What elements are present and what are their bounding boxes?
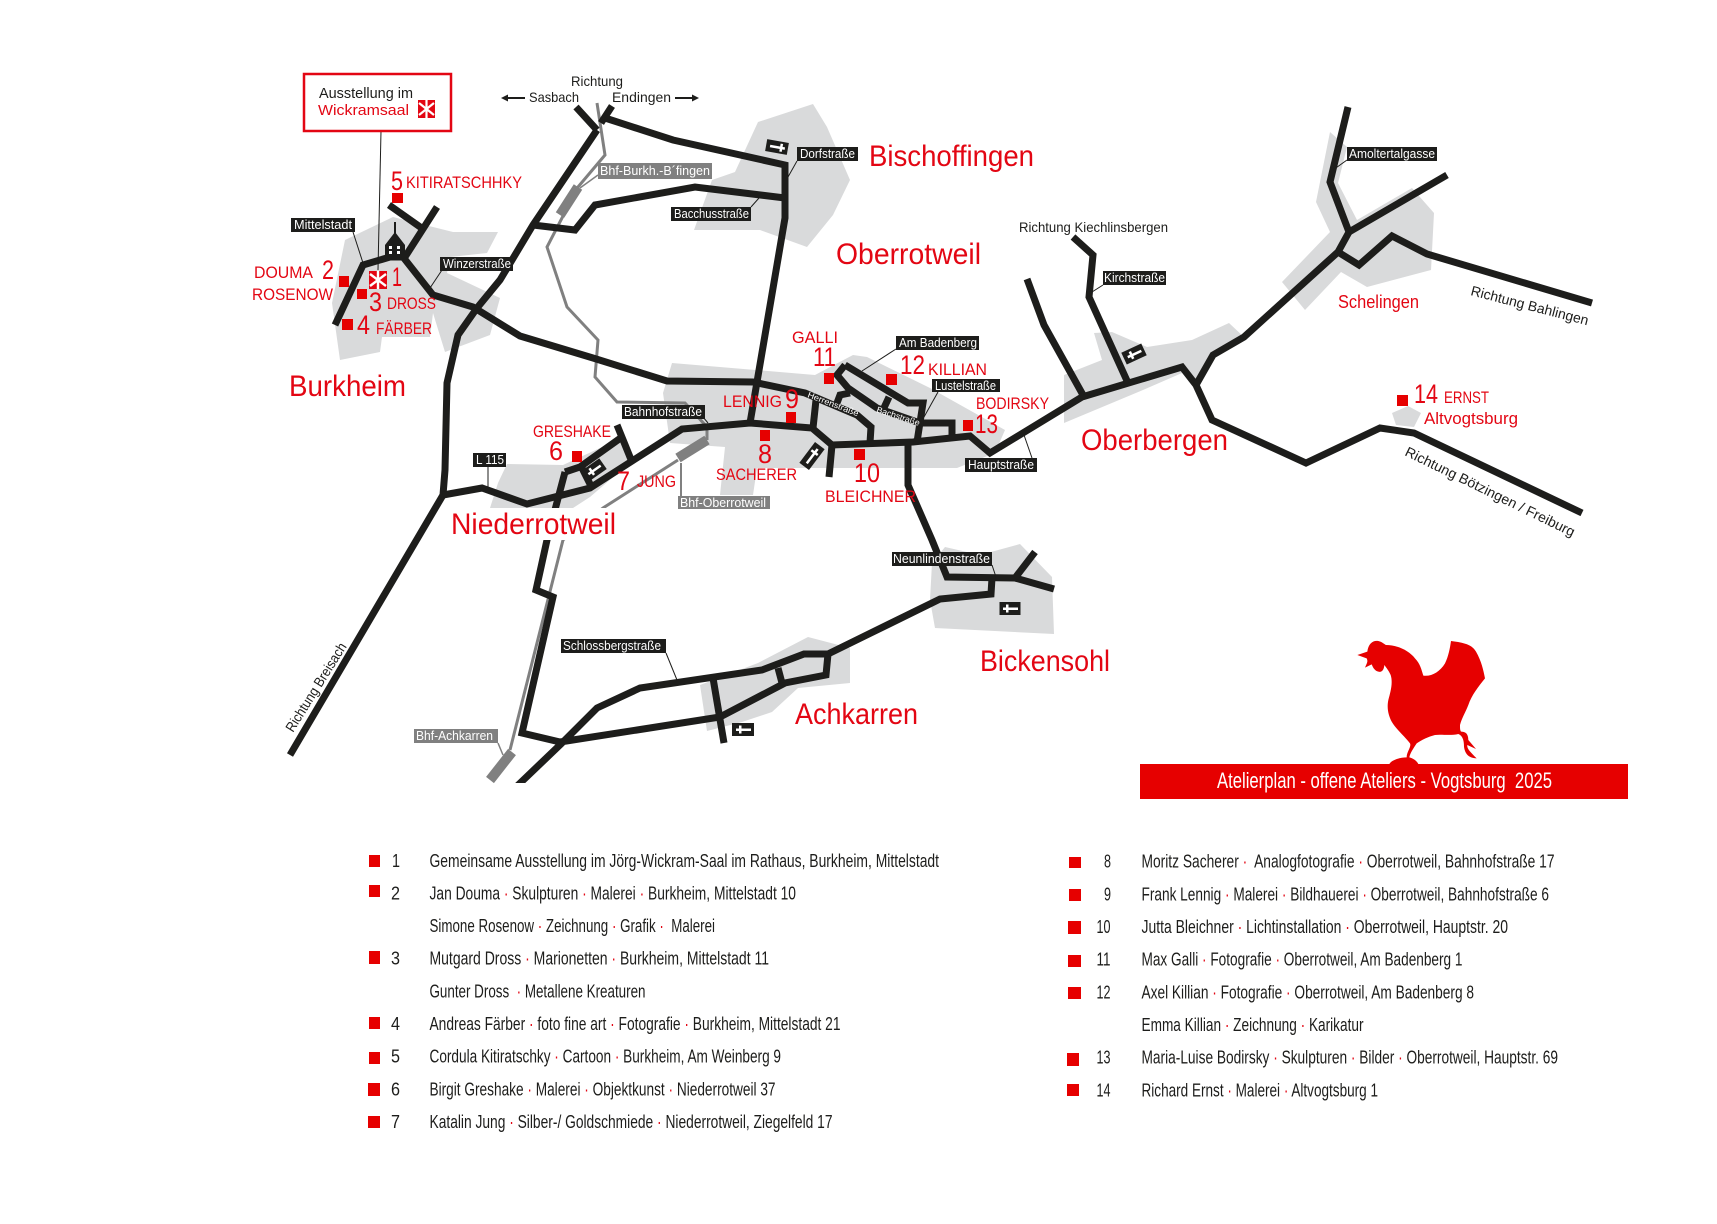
direction labels: Richtung Kiechlinsbergen	[1019, 219, 1168, 235]
marker 14: 14	[1414, 379, 1438, 409]
town names: Burkheim	[289, 370, 406, 403]
marker 9: LENNIG	[723, 392, 782, 411]
item 2: 2	[391, 883, 400, 903]
item 2: Jan Douma · Skulpturen · Malerei · Burkheim, Mittelstadt 10	[430, 883, 796, 903]
marker 7: JUNG	[637, 472, 676, 491]
marker 13	[963, 394, 1049, 439]
item 5: Cordula Kitiratschky · Cartoon · Burkheim, Am Weinberg 9	[430, 1047, 781, 1067]
item 12	[1068, 982, 1474, 1035]
marker 2: 2	[322, 255, 334, 285]
item 12: Emma Killian · Zeichnung · Karikatur	[1142, 1015, 1364, 1035]
marker 1: 1	[392, 262, 402, 292]
item 11: 11	[1096, 950, 1110, 970]
item 9: Frank Lennig · Malerei · Bildhauerei · Oberrotweil, Bahnhofstraße 6	[1142, 884, 1549, 904]
item 2	[369, 883, 796, 936]
railway line	[490, 103, 707, 780]
icon: church Niederrotweil	[581, 458, 607, 482]
direction labels: Endingen	[612, 89, 671, 105]
street name tags: Hauptstraße	[968, 458, 1034, 472]
item 6: Birgit Greshake · Malerei · Objektkunst · Niederrotweil 37	[430, 1079, 775, 1099]
icon: church Oberrotweil	[799, 442, 825, 470]
item 10: Jutta Bleichner · Lichtinstallation · Oberrotweil, Hauptstr. 20	[1142, 917, 1508, 937]
item 11: Max Galli · Fotografie · Oberrotweil, Am Badenberg 1	[1142, 950, 1462, 970]
item 13: Maria-Luise Bodirsky · Skulpturen · Bilder · Oberrotweil, Hauptstr. 69	[1142, 1048, 1558, 1068]
street name tags: Herrenstraße	[806, 390, 861, 418]
item 6: 6	[391, 1079, 400, 1099]
marker 9	[723, 384, 799, 423]
marker 5	[391, 166, 522, 203]
marker 1	[369, 262, 402, 292]
street name tags: L 115	[476, 453, 504, 467]
marker 10: 10	[854, 458, 880, 488]
legend: left column	[368, 851, 939, 1132]
item 13: 13	[1096, 1048, 1110, 1068]
marker 4: FÄRBER	[376, 319, 432, 338]
item 10: 10	[1096, 917, 1110, 937]
legend: right column	[1067, 852, 1558, 1100]
item 7: 7	[391, 1112, 400, 1132]
street name tags: Mittelstadt	[294, 218, 353, 232]
marker 5: 5	[391, 166, 403, 196]
marker 6: 6	[549, 436, 563, 466]
marker 4: 4	[357, 310, 370, 340]
item 2: Simone Rosenow · Zeichnung · Grafik · Malerei	[430, 916, 715, 936]
marker 11	[792, 328, 838, 384]
callout: Ausstellung im Wickramsaal: Ausstellung im	[319, 85, 413, 102]
station tags: Bhf-Burkh.-B´fingen	[600, 164, 710, 178]
town names: Niederrotweil	[451, 508, 616, 541]
marker 10	[825, 449, 916, 506]
marker 2: ROSENOW	[252, 285, 333, 304]
town names: Oberbergen	[1081, 424, 1228, 457]
item 3: Mutgard Dross · Marionetten · Burkheim, Mittelstadt 11	[430, 949, 769, 969]
marker 8: SACHERER	[716, 465, 797, 484]
title banner	[1140, 764, 1628, 799]
street name tags: Schlossbergstraße	[563, 639, 661, 653]
icon: church Achkarren	[732, 723, 754, 736]
direction labels: Richtung Bahlingen	[1469, 282, 1590, 328]
town names: Oberrotweil	[836, 238, 981, 271]
mask behind Niederrotweil	[448, 508, 620, 540]
marker 4	[342, 310, 432, 340]
item 3	[369, 949, 769, 1001]
item 14	[1067, 1080, 1378, 1100]
street name tags: Kirchstraße	[1104, 271, 1165, 285]
icon: church Bickensohl	[1000, 602, 1020, 615]
item 8: Moritz Sacherer · Analogfotografie · Oberrotweil, Bahnhofstraße 17	[1142, 852, 1554, 872]
direction labels: Richtung	[571, 73, 623, 89]
marker 8	[716, 430, 797, 484]
item 1: Gemeinsame Ausstellung im Jörg-Wickram-Saal im Rathaus, Burkheim, Mittelstadt	[430, 851, 939, 871]
item 8: 8	[1104, 852, 1111, 872]
marker 2	[252, 255, 349, 304]
marker 8: 8	[758, 439, 772, 469]
item 12: Axel Killian · Fotografie · Oberrotweil, Am Badenberg 8	[1142, 982, 1474, 1002]
town names: Bischoffingen	[869, 140, 1034, 173]
town names: Bickensohl	[980, 645, 1110, 678]
marker 11: GALLI	[792, 328, 838, 347]
street name tags: Am Badenberg	[899, 336, 977, 350]
town names: Schelingen	[1338, 292, 1419, 312]
marker 3: 3	[369, 287, 382, 317]
street name tags: Lustelstraße	[935, 379, 996, 393]
direction labels	[282, 73, 1590, 735]
station tags: Bhf-Oberrotweil	[680, 496, 766, 510]
street name tags: Bachstraße	[875, 404, 922, 428]
town names: Achkarren	[795, 698, 918, 731]
marker 11: 11	[813, 342, 836, 372]
station tags: Bhf-Achkarren	[416, 729, 493, 743]
item 12: 12	[1096, 982, 1110, 1002]
item 3: Gunter Dross · Metallene Kreaturen	[430, 981, 646, 1001]
callout: Ausstellung im Wickramsaal	[304, 74, 451, 131]
item 4: Andreas Färber · foto fine art · Fotografie · Burkheim, Mittelstadt 21	[430, 1014, 840, 1034]
artist markers and names	[252, 166, 1518, 506]
direction labels: Richtung Breisach	[282, 640, 350, 735]
station tags	[414, 163, 770, 743]
street name tags: Dorfstraße	[800, 147, 855, 161]
road network	[290, 106, 1592, 795]
marker 14: ERNST	[1444, 388, 1489, 407]
marker 12: KILLIAN	[928, 360, 987, 379]
street name tags: Bahnhofstraße	[624, 405, 702, 419]
street name tags: Winzerstraße	[443, 257, 511, 271]
icon: church Bischoffingen	[765, 139, 789, 155]
marker 14	[1397, 379, 1518, 428]
item 3: 3	[391, 949, 400, 969]
marker 12	[886, 350, 987, 385]
item 14: 14	[1096, 1080, 1110, 1100]
marker 13: BODIRSKY	[976, 394, 1049, 413]
marker 3: DROSS	[387, 294, 436, 313]
marker 13: 13	[975, 409, 998, 439]
marker 7: 7	[617, 466, 630, 496]
item 9: 9	[1104, 884, 1111, 904]
item 4: 4	[391, 1014, 400, 1034]
direction labels: Sasbach	[529, 89, 579, 105]
street name tags: Neunlindenstraße	[893, 552, 990, 566]
icon: church Oberbergen	[1121, 343, 1147, 365]
item 7: Katalin Jung · Silber-/ Goldschmiede · Niederrotweil, Ziegelfeld 17	[430, 1112, 832, 1132]
direction labels: Richtung Bötzingen / Freiburg	[1403, 443, 1578, 540]
street name tags: Amoltertalgasse	[1349, 147, 1435, 161]
map	[252, 73, 1592, 795]
marker 10: BLEICHNER	[825, 487, 916, 506]
icon: Burkheim church	[385, 222, 405, 258]
callout: Ausstellung im Wickramsaal: Wickramsaal	[318, 102, 409, 119]
item 5: 5	[391, 1047, 400, 1067]
icon: red hen	[1357, 641, 1485, 764]
marker 12: 12	[900, 350, 925, 380]
marker 2: DOUMA	[254, 263, 314, 282]
street name tags	[291, 147, 1437, 653]
label leader lines	[353, 131, 1347, 680]
street name tags: Bacchusstraße	[674, 207, 749, 221]
title banner: Atelierplan - offene Ateliers - Vogtsburg 2025	[1217, 768, 1552, 793]
item 14: Richard Ernst · Malerei · Altvogtsburg 1	[1142, 1080, 1378, 1100]
item 1: 1	[392, 851, 400, 871]
marker 6	[533, 422, 611, 466]
town names	[289, 140, 1419, 731]
marker 14: Altvogtsburg	[1424, 409, 1518, 428]
village areas	[332, 104, 1434, 731]
marker 3	[357, 287, 436, 317]
marker 5: KITIRATSCHHKY	[406, 173, 522, 192]
marker 9: 9	[785, 384, 799, 414]
marker 7	[617, 466, 676, 496]
marker 6: GRESHAKE	[533, 422, 611, 441]
